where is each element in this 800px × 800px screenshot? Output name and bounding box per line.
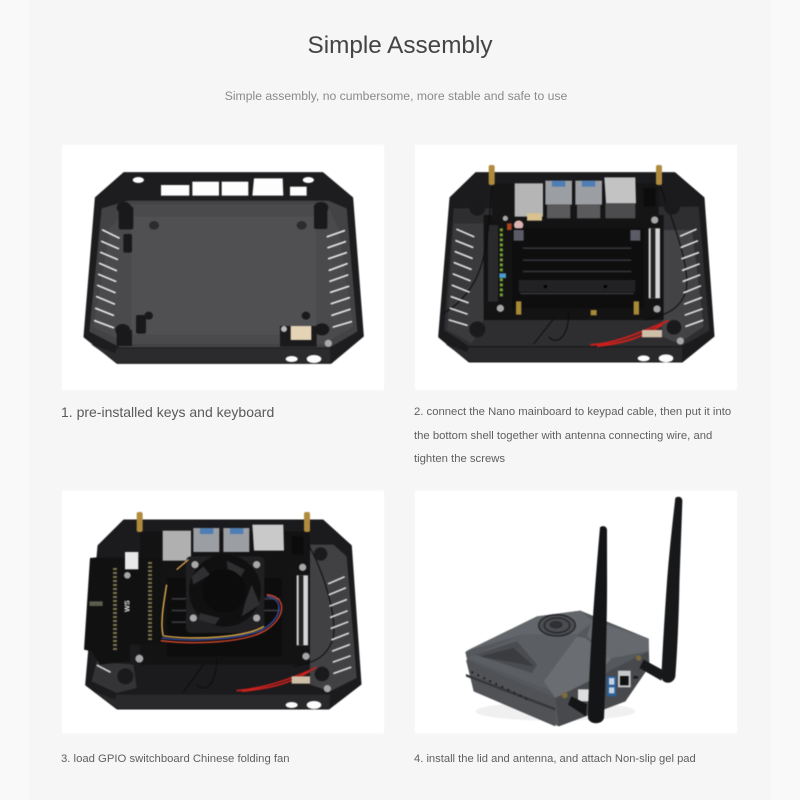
ports <box>515 183 543 217</box>
caption: step 2: 2. connect the Nano mainboard to keypad cable, then put it into <box>414 406 731 418</box>
panel: step 2 photo, mainboard installed <box>416 146 736 390</box>
panel: step 1 photo, empty bottom shell <box>62 146 384 390</box>
shell <box>439 173 713 361</box>
subtitle: Simple assembly, no cumbersome, more stable and safe to use <box>225 89 567 103</box>
caption: step 2: the bottom shell together with antenna connecting wire, and <box>414 430 712 442</box>
rear port windows <box>133 177 321 363</box>
board <box>484 215 664 320</box>
cables <box>183 545 334 692</box>
GPIO switch board <box>84 557 162 665</box>
main board <box>140 531 310 665</box>
heatsink below fan <box>167 578 282 656</box>
vent slots <box>95 230 351 328</box>
heatsink <box>512 228 644 308</box>
GPIO header <box>488 225 498 302</box>
panel: step 3 photo, GPIO board and fan: WS <box>123 600 132 612</box>
caption: step 2: tighten the screws <box>414 453 505 465</box>
caption: step 1: 1. pre-installed keys and keyboard <box>61 404 274 420</box>
antenna rear <box>639 497 682 683</box>
standoffs <box>115 202 329 346</box>
shadow <box>475 702 635 721</box>
caption: step 3: 3. load GPIO switchboard Chinese folding fan <box>61 753 290 765</box>
connector ribbon <box>297 575 308 645</box>
front holes and vents <box>445 344 682 361</box>
cables <box>444 187 687 320</box>
panel: step 4 photo, assembled router <box>416 492 736 732</box>
ports <box>163 531 191 561</box>
caption: step 4: 4. install the lid and antenna, and attach Non-slip gel pad <box>414 753 696 765</box>
side vents <box>471 672 530 701</box>
caption: step 2 <box>414 406 731 465</box>
ports <box>607 676 616 696</box>
standoffs <box>469 199 681 337</box>
antenna front <box>568 526 607 723</box>
antenna connectors <box>489 165 662 185</box>
keyboard connector <box>280 326 317 347</box>
router body <box>465 611 649 726</box>
standoffs <box>117 547 329 684</box>
shell outer <box>85 173 363 363</box>
connector strips <box>649 228 660 298</box>
title: Simple Assembly <box>308 32 492 59</box>
fan wires <box>161 560 282 643</box>
shell <box>86 521 360 708</box>
front face <box>93 691 330 708</box>
gold screws <box>516 301 639 315</box>
panel: step 3 photo, GPIO board and fan <box>62 492 384 732</box>
fan <box>186 555 264 633</box>
top fan vent <box>539 615 575 636</box>
